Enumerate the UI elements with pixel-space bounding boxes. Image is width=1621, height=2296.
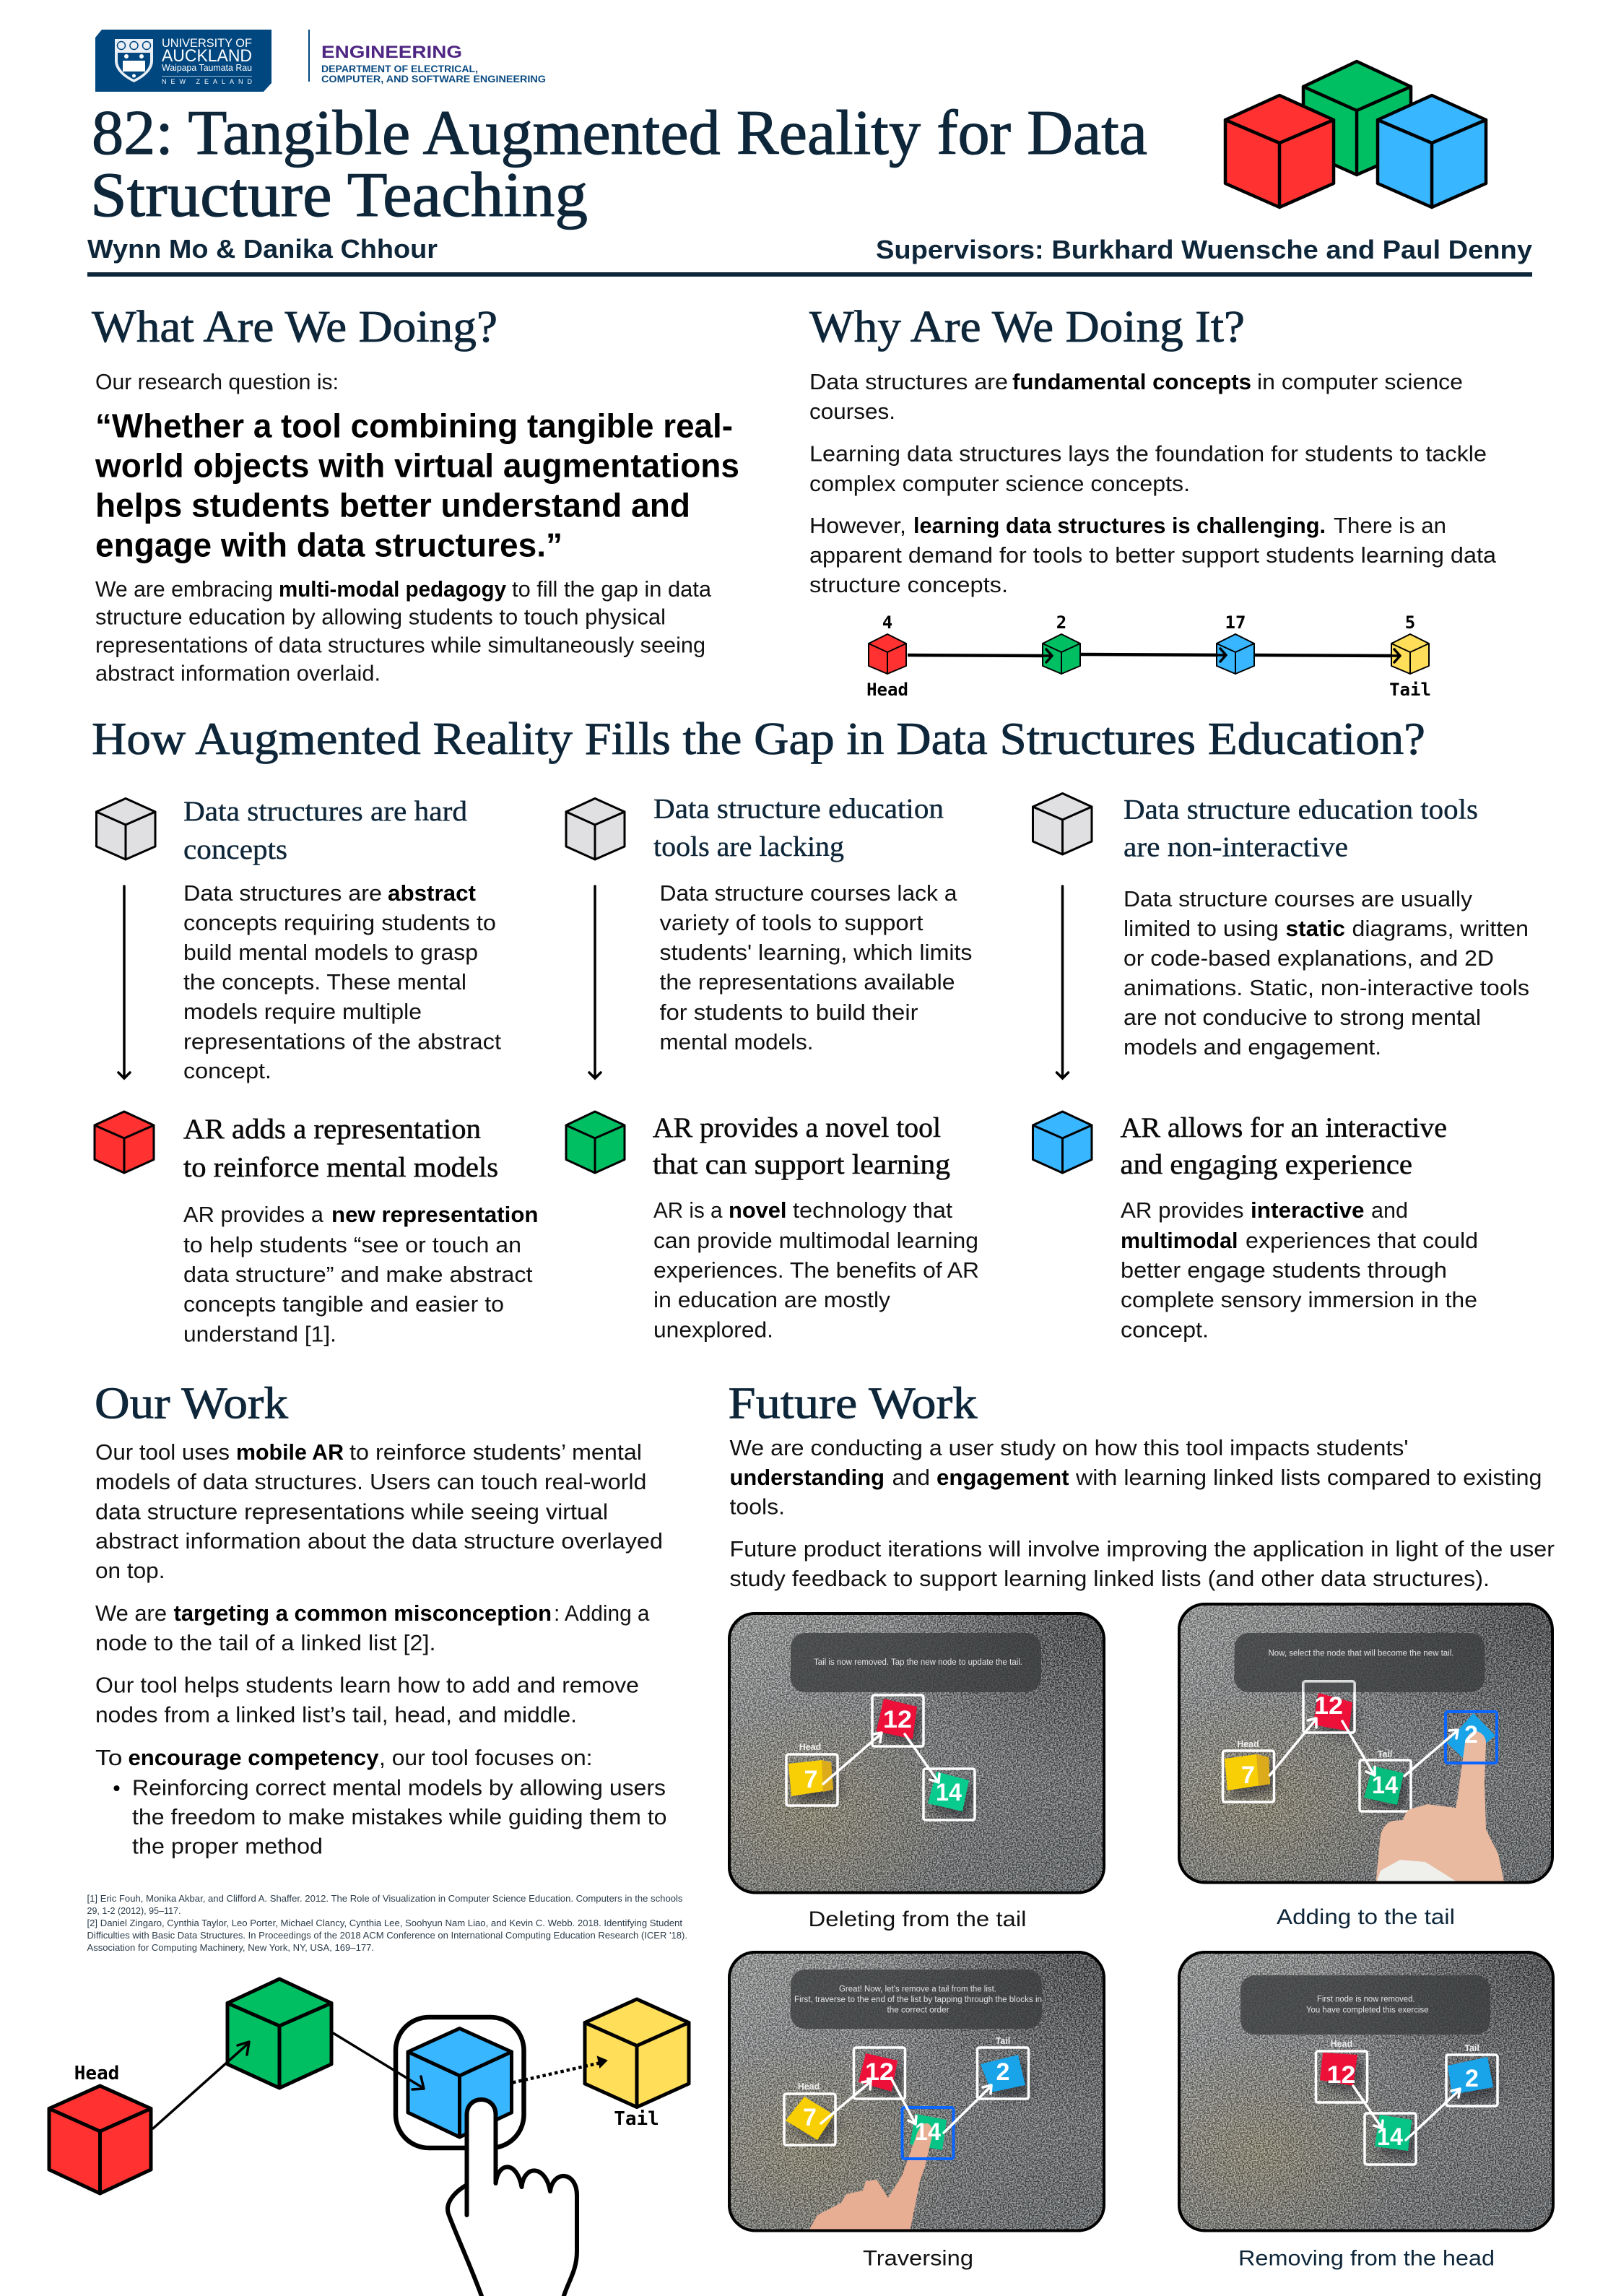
cube: blue [408, 2028, 511, 2137]
cube: yellow [585, 1999, 689, 2107]
panel: AR provides a novel tool [566, 1112, 979, 1342]
arrow [1057, 886, 1069, 1078]
diagram: linked list [866, 612, 1431, 700]
diagram: tapping a node in a linked list [49, 1979, 689, 2296]
body text: There is an [1334, 513, 1446, 538]
photo: deleting from the tail [728, 1612, 1105, 1894]
heading: Future Work [728, 1379, 978, 1429]
body text: abstract [388, 880, 476, 906]
body text: structure education by allowing students to touch physical [95, 604, 666, 630]
photo: removing from the head: Tail [1464, 2043, 1479, 2053]
engineering department logo: COMPUTER, AND SOFTWARE ENGINEERING [321, 74, 546, 85]
body text: complete sensory immersion in the [1121, 1287, 1477, 1312]
arrow: head to second [153, 2042, 249, 2128]
body text: mobile AR [236, 1439, 344, 1465]
body text [183, 1202, 539, 1346]
engineering department logo: DEPARTMENT OF ELECTRICAL, [321, 64, 478, 74]
body text: the concepts. These mental [183, 969, 466, 995]
photo: removing from the head: 2 [1465, 2065, 1479, 2092]
body text: AR provides a [183, 1202, 324, 1227]
body text: To [95, 1745, 123, 1770]
references: [1] Eric Fouh, Monika Akbar, and Clifford A. Shaffer. 2012. The Role of Visualization in Computer Science Education. Computers in the schools [87, 1894, 683, 1904]
photo: deleting from the tail: 14 [936, 1779, 962, 1806]
body text: concept. [183, 1058, 271, 1083]
research question: “Whether a tool combining tangible real- [95, 407, 733, 445]
icon: three cubes [1225, 61, 1486, 207]
photo: removing from the head: Head [1331, 2039, 1352, 2049]
arrow: dotted link to tail [513, 2057, 607, 2083]
university logo: Waipapa Taumata Rau [162, 62, 252, 73]
heading: that can support learning [653, 1149, 950, 1180]
panel: AR adds a representation [95, 1112, 539, 1346]
heading: Data structure education [653, 793, 944, 825]
body text: models of data structures. Users can touch real-world [95, 1469, 647, 1494]
body text: build mental models to grasp [183, 940, 478, 965]
arrow [589, 886, 601, 1078]
head label: Head [866, 680, 908, 700]
photo: adding to the tail: 14 [1372, 1772, 1398, 1799]
heading: AR provides a novel tool [653, 1112, 941, 1143]
heading: tools are lacking [653, 831, 844, 862]
body text [809, 369, 1497, 597]
body text: learning data structures is challenging. [913, 513, 1326, 538]
references: 29, 1-2 (2012), 95–117. [87, 1906, 181, 1916]
body text: can provide multimodal learning [653, 1228, 978, 1253]
body text: multi-modal pedagogy [279, 576, 507, 602]
body text: abstract information overlaid. [95, 660, 381, 686]
node green [1043, 634, 1080, 674]
body text: Learning data structures lays the foundation for students to tackle [809, 441, 1487, 467]
node values: 17 [1225, 612, 1246, 633]
heading [183, 796, 468, 865]
body text: limited to using [1124, 916, 1279, 941]
body text: concepts tangible and easier to [183, 1291, 504, 1317]
cube: red [49, 2086, 151, 2193]
body text [1124, 886, 1529, 1060]
body text: targeting a common misconception [173, 1600, 552, 1626]
heading: AR adds a representation [183, 1114, 481, 1145]
icon: gray cube [1033, 793, 1092, 854]
body text: engagement [936, 1465, 1069, 1490]
body text: concepts requiring students to [183, 910, 496, 935]
photo: traversing: Head [798, 2081, 820, 2092]
panel: what are we doing [92, 303, 739, 686]
body text: multimodal [1121, 1228, 1238, 1253]
panel: our work [95, 1379, 667, 1859]
body text: : Adding a [554, 1600, 650, 1626]
photo: traversing: Tail [996, 2036, 1010, 2046]
heading: AR allows for an interactive [1121, 1112, 1447, 1143]
body text: study feedback to support learning linked lists (and other data structures). [729, 1566, 1490, 1591]
body text [729, 1435, 1555, 1591]
body text: Data structure courses are usually [1124, 886, 1473, 911]
photo: traversing: 7 [803, 2104, 817, 2131]
references: Difficulties with Basic Data Structures. In Proceedings of the 2018 ACM Conference on International Computing Education Research (ICER '18). [87, 1931, 687, 1941]
photo: adding to the tail: Tail [1378, 1749, 1392, 1759]
body text: Our tool helps students learn how to add and remove [95, 1673, 639, 1697]
photo: deleting from the tail: Head [799, 1742, 821, 1752]
photo: removing from the head: You have completed this exercise [1306, 2006, 1428, 2015]
body text [95, 1439, 663, 1770]
body text: concept. [1121, 1317, 1209, 1342]
research question: world objects with virtual augmentations [95, 446, 739, 484]
body text: with learning linked lists compared to existing [1075, 1465, 1542, 1490]
body text: encourage competency [129, 1745, 379, 1770]
bullet list: the freedom to make mistakes while guiding them to [132, 1804, 667, 1829]
body text: for students to build their [660, 1000, 918, 1025]
node values: 4 [882, 612, 892, 633]
title: Structure Teaching [90, 160, 588, 230]
university logo [95, 30, 271, 92]
body text: AR provides [1121, 1197, 1243, 1223]
research question: engage with data structures.” [95, 526, 562, 563]
node blue [1217, 634, 1254, 674]
body text: tools. [729, 1494, 785, 1520]
icon: gray cube [97, 799, 155, 859]
body text: representations of data structures while simultaneously seeing [95, 633, 705, 657]
photo: deleting from the tail: 12 [883, 1706, 912, 1733]
panel: AR allows interactive experience [1033, 1112, 1478, 1342]
photo: traversing: First, traverse to the end of the list by tapping through the blocks in [794, 1996, 1042, 2004]
photo: adding to the tail [1178, 1603, 1553, 1885]
photo: adding to the tail: Head [1237, 1739, 1259, 1749]
body text: are not conducive to strong mental [1124, 1005, 1481, 1030]
body text: diagrams, written [1352, 916, 1529, 941]
heading: and engaging experience [1121, 1149, 1412, 1180]
body text: to reinforce students’ mental [349, 1439, 642, 1465]
body text: in computer science [1257, 369, 1463, 394]
body text: in education are mostly [653, 1287, 891, 1312]
body text: AR is a [653, 1197, 723, 1223]
body text: understanding [729, 1465, 885, 1490]
photo: traversing [728, 1951, 1105, 2232]
bullet list [114, 1775, 667, 1859]
body text: understand [1]. [183, 1322, 336, 1346]
heading: Data structures are hard [183, 796, 468, 827]
photo: deleting from the tail: Tail is now removed. Tap the new node to update the tail. [814, 1658, 1022, 1667]
body text: new representation [331, 1202, 539, 1227]
body text: courses. [809, 399, 895, 424]
node values [882, 612, 1415, 633]
photo: traversing: 12 [865, 2058, 894, 2086]
photo: removing from the head: 12 [1327, 2061, 1356, 2089]
body text: We are embracing [95, 576, 273, 602]
body text [183, 880, 501, 1083]
body text: and [1371, 1197, 1408, 1223]
body text: apparent demand for tools to better support students learning data [809, 542, 1497, 568]
body text: However, [809, 513, 906, 538]
university logo: UNIVERSITY OF [162, 36, 252, 50]
photo: deleting from the tail: 7 [804, 1766, 817, 1793]
photo: removing from the head: First node is now removed. [1317, 1995, 1415, 2003]
body text: novel [729, 1197, 787, 1223]
bullet list: Reinforcing correct mental models by allowing users [132, 1775, 666, 1800]
bullet list: the proper method [132, 1833, 323, 1859]
heading [653, 793, 944, 862]
body text: complex computer science concepts. [809, 471, 1190, 496]
engineering department logo: ENGINEERING [321, 43, 462, 62]
body text: Our tool uses [95, 1439, 230, 1465]
body text [660, 880, 972, 1054]
body text: static [1285, 916, 1345, 941]
panel: tools are non-interactive [1033, 793, 1529, 1078]
body text: unexplored. [653, 1317, 773, 1342]
body text: and [892, 1465, 930, 1490]
heading [1121, 1112, 1447, 1180]
body text: nodes from a linked list’s tail, head, and middle. [95, 1702, 577, 1728]
panel: why are we doing it [809, 303, 1497, 700]
body text: abstract information about the data structure overlayed [95, 1528, 663, 1554]
heading: to reinforce mental models [183, 1152, 498, 1183]
body text: We are [95, 1600, 167, 1626]
body text: mental models. [660, 1029, 813, 1054]
body text: Future product iterations will involve improving the application in light of the user [729, 1536, 1555, 1561]
references: [2] Daniel Zingaro, Cynthia Taylor, Leo Porter, Michael Clancy, Cynthia Lee, Soohyun Nam Liao, and Kevin C. Webb. 2018. Identifying Student [87, 1918, 683, 1928]
selection frame [396, 2017, 524, 2148]
engineering department logo [308, 30, 546, 85]
body text: Data structures are [809, 369, 1008, 394]
body text: fundamental concepts [1012, 369, 1251, 394]
title [90, 98, 1147, 230]
body text: technology that [793, 1197, 952, 1223]
body text [653, 1197, 979, 1342]
photo: traversing: the correct order [887, 2006, 949, 2015]
university logo: NEW ZEALAND [162, 78, 253, 85]
body text [95, 576, 712, 686]
heading: are non-interactive [1124, 832, 1348, 862]
body text: data structure” and make abstract [183, 1262, 533, 1287]
heading [1124, 794, 1478, 862]
heading [653, 1112, 950, 1180]
body text: structure concepts. [809, 572, 1008, 597]
heading: Data structure education tools [1124, 794, 1478, 825]
tail label: Tail [614, 2108, 659, 2130]
references: Association for Computing Machinery, New York, NY, USA, 169–177. [87, 1943, 374, 1953]
node values: 2 [1056, 612, 1066, 633]
body text: on top. [95, 1558, 165, 1583]
body text: animations. Static, non-interactive tools [1124, 975, 1529, 1000]
body text: representations of the abstract [183, 1028, 501, 1054]
caption: removing from the head: Removing from the head [1238, 2246, 1495, 2271]
body text: , our tool focuses on: [379, 1745, 592, 1770]
body text: models and engagement. [1124, 1034, 1381, 1060]
cube: green [227, 1979, 331, 2088]
body text: experiences. The benefits of AR [653, 1257, 979, 1283]
title: 82: Tangible Augmented Reality for Data [92, 98, 1147, 168]
heading: What Are We Doing? [92, 303, 497, 352]
panel: future work [728, 1379, 1555, 1591]
body text: node to the tail of a linked list [2]. [95, 1630, 436, 1655]
body text: to help students “see or touch an [183, 1232, 521, 1257]
body text: Data structures are [183, 880, 382, 906]
photo: traversing: Great! Now, let's remove a tail from the list. [839, 1985, 996, 1993]
head label: Head [74, 2063, 119, 2084]
arrows [908, 654, 1399, 656]
heading: concepts [183, 834, 287, 865]
body text: Data structure courses lack a [660, 880, 957, 906]
research question [95, 407, 739, 563]
body text: students' learning, which limits [660, 940, 972, 965]
body text: We are conducting a user study on how this tool impacts students' [729, 1435, 1408, 1460]
research question: helps students better understand and [95, 487, 690, 524]
body text: variety of tools to support [660, 910, 924, 935]
body text: to fill the gap in data [512, 576, 712, 602]
body text: experiences that could [1246, 1228, 1478, 1253]
photo: adding to the tail: Now, select the node that will become the new tail. [1268, 1650, 1454, 1658]
heading: Our Work [95, 1379, 288, 1429]
crest [115, 39, 153, 82]
icon: pointing hand [448, 2100, 577, 2296]
node values: 5 [1405, 612, 1415, 633]
supervisors: Supervisors: Burkhard Wuensche and Paul Denny [876, 235, 1532, 264]
icon: red cube [95, 1112, 154, 1173]
references [87, 1894, 687, 1953]
intro text: Our research question is: [95, 369, 339, 394]
arrow: second to third [334, 2033, 424, 2089]
node yellow [1391, 634, 1429, 674]
icon: blue cube [1033, 1112, 1092, 1173]
body text: or code-based explanations, and 2D [1124, 945, 1494, 971]
body text: better engage students through [1121, 1257, 1447, 1283]
body text: the representations available [660, 969, 955, 995]
body text: models require multiple [183, 999, 422, 1024]
heading [183, 1114, 498, 1183]
body text [1121, 1197, 1478, 1342]
university logo: AUCKLAND [162, 46, 252, 66]
section heading: how AR fills the gap: How Augmented Reality Fills the Gap in Data Structures Education? [92, 713, 1425, 764]
photo: adding to the tail: 7 [1241, 1762, 1255, 1789]
photo: removing from the head [1178, 1951, 1554, 2232]
photo: adding to the tail: 2 [1464, 1721, 1478, 1749]
photo: removing from the head: 14 [1377, 2123, 1403, 2151]
node red [869, 634, 906, 674]
caption: deleting from the tail: Deleting from the tail [809, 1907, 1027, 1931]
panel: data structures are hard concepts [97, 796, 501, 1083]
body text: data structure representations while seeing virtual [95, 1499, 608, 1524]
body text: interactive [1251, 1197, 1365, 1223]
icon: gray cube [566, 799, 625, 859]
authors: Wynn Mo & Danika Chhour [87, 234, 438, 264]
photo: adding to the tail: 12 [1314, 1692, 1343, 1720]
heading: Why Are We Doing It? [809, 303, 1245, 352]
icon: green cube [566, 1112, 625, 1173]
arrow [118, 886, 130, 1078]
photo: traversing: 14 [915, 2118, 941, 2146]
photo: traversing: 2 [996, 2058, 1009, 2086]
panel: education tools are lacking [566, 793, 972, 1078]
caption: traversing: Traversing [863, 2246, 973, 2271]
caption: adding to the tail: Adding to the tail [1277, 1905, 1455, 1929]
tail label: Tail [1389, 680, 1431, 700]
